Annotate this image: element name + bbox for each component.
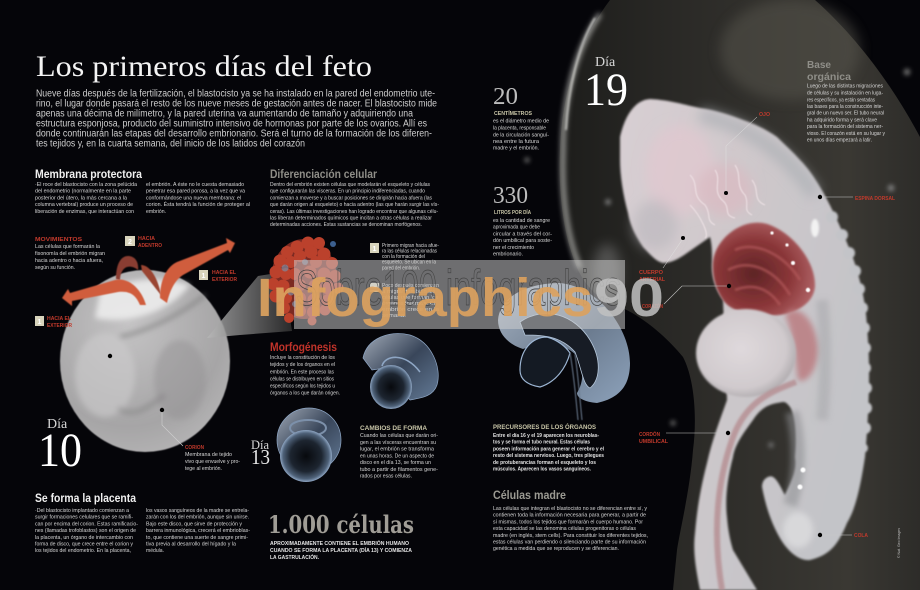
intro text: rino, el lugar donde pasará el resto de los nueve meses de gestación antes de nacer. El blastocisto mide [36,98,437,110]
step 1 text: con la formación del [382,254,425,260]
section: se forma la placenta: ·Del blastocisto implantado comienzan a [35,508,130,514]
label: hacia adentro [125,236,162,249]
section: base organica: orgánica [807,71,851,83]
section: diferenciacion celular: Dentro del embrión existen células que modelarán el esqueleto y células [270,182,430,188]
callout: cuerpo: ARTERIAL [639,277,666,283]
label: movimientos: hacia adentro o hacia afuera, [35,258,103,264]
diagram: day 10 blastocyst sphere [60,270,230,452]
stat: 330 litros: LITROS POR DÍA [494,208,531,216]
stat: 330 litros: 330 [493,183,528,209]
section: diferenciacion celular: determinadas acciones. Estas sustancias se denominan morfógenos. [270,222,422,228]
section: celulas madre: estas células van perdiendo o silenciando parte de su información [493,540,646,546]
stat: 20 centimetros: CENTÍMETROS [494,109,533,117]
section: se forma la placenta: los tejidos del endometrio. En la placenta, [35,548,131,554]
label: movimientos: fisonomía del embrión migran [35,251,105,257]
section: se forma la placenta: zarán con los del embrión, aunque sin unirse. [146,515,249,521]
label: corion: vivo que envuelve y pro- [185,459,240,465]
callout: cordon umbilical: UMBILICAL [639,439,669,445]
section: celulas madre: genética a medida que se reproducen y se diferencian. [493,546,619,552]
label: corion: tege al embrión. [185,466,222,472]
label: hacia el exterior (right): EXTERIOR [212,277,237,283]
section: diferenciacion celular: que darán origen al esqueleto) o hacia adentro (las que harán surgir las vís- [270,202,439,208]
stat: 20 centimetros: nea entre la futura [493,139,540,145]
step 1 text: pared del embrión. [382,265,420,271]
illustration: cell cluster [267,236,344,326]
section: base organica: res específicos, ya están sentadas [807,97,875,103]
marker dots [108,354,112,358]
label: hacia el exterior (left) [35,316,72,329]
section: membrana protectora: del endometrio (normalmente en la parte [35,189,131,195]
section: diferenciacion celular: comienzan a moverse y a buscar posiciones se dirigirán hacia afuera (las [270,195,432,201]
section: morfogenesis: embrión. En este proceso las [270,370,334,376]
label: hacia el exterior (right): HACIA EL [212,270,237,276]
section: se forma la placenta: forma de disco, que crece entre el corion y [35,542,133,548]
section: membrana protectora: columna vertebral) produce un proceso de [35,202,133,208]
section: base organica: para la formación del sistema ner- [807,124,883,130]
callout: cuerpo [639,236,685,283]
step 2 text: órganos internos. El [382,301,435,307]
watermark: 90 [594,268,664,328]
label: movimientos [35,237,105,271]
section: se forma la placenta: tiva previa al desarrollo del hígado y la [146,542,237,548]
section: celulas madre [493,490,648,552]
section: morfogenesis: órganos a los que darán origen. [270,390,340,396]
label: movimientos: MOVIMIENTOS [35,237,83,243]
photo: amniotic sac [524,0,920,590]
callout: corazon: CORAZÓN [642,302,663,310]
callout: cordon umbilical [639,430,730,445]
label: day 10: Día [47,417,68,432]
intro text: Nueve días después de la fertilización, el blastocisto ya se ha instalado en la pared del endometrio ute- [36,88,435,100]
section: se forma la placenta: Se forma la placenta [35,493,137,505]
section: precursores de los organos: músculos. Aparecen los vasos sanguíneos. [493,466,591,472]
section: precursores de los organos: Entre el día 16 y el 19 aparecen los neuroblas- [493,433,599,439]
section: celulas madre: madre (en inglés, stem cells). Para constituir los diferentes tejidos, [493,533,648,539]
section: cambios de forma: gen a las vísceras encuentran su [360,440,436,446]
label: hacia adentro: HACIA [138,236,155,242]
step 2 text: semana. [382,313,406,319]
section: diferenciacion celular: que configurarán las vísceras. En un principio indiferenciadas, cuando [270,189,425,195]
section: precursores de los organos [493,423,604,472]
callout: cuerpo: CUERPO [639,270,663,276]
stat: 330 litros [493,183,552,258]
callout: 1.000 celulas [268,510,414,561]
label: day 13: Día [251,438,270,452]
callout: cola: COLA [854,533,868,539]
section: membrana protectora: Membrana protectora [35,169,143,181]
section: diferenciacion celular: Diferenciación celular [270,169,377,181]
label: day 19: 19 [584,64,628,116]
yolk sac [696,309,796,397]
section: celulas madre: contienen toda la información necesaria para generar, a partir de [493,513,646,519]
section: base organica [807,59,885,143]
title: Los primeros días del feto [36,50,372,83]
intro text: tes tejidos y, en la cuarta semana, del inicio de los latidos del corazón [36,138,305,150]
watermark: Infographics [257,268,593,328]
section: se forma la placenta: nes (llamadas trofoblastos) son el origen de [35,528,136,534]
stat: 330 litros: aproximada que debe [493,225,540,231]
callout: espina dorsal: ESPINA DORSAL [855,196,896,202]
label: hacia adentro: ADENTRO [138,243,162,249]
step 2 text: células que forman los [382,295,438,301]
watermark: Sobre100 infographics [296,260,621,316]
step 2 text: embrión crece en la [382,307,440,313]
section: diferenciacion celular: las liberan determinados químicos que incitan a otras células a realizar [270,216,432,222]
section: se forma la placenta: los vasos sanguíneos de la madre se entrela- [146,508,249,514]
stat: 330 litros: embrionario. [493,252,523,258]
head shading [633,115,815,250]
label: day 13: 13 [251,445,270,469]
step 1 text: Primero migran hacia afue- [382,243,439,249]
stat: 20 centimetros: la placenta, responsable [493,125,546,131]
section: cambios de forma: tubo a partir de filamentos gene- [360,467,438,473]
section: cambios de forma: en unas horas. De un aspecto de [360,454,434,460]
section: membrana protectora: el embrión. A éste no le cuesta demasiado [146,182,244,188]
stat: 20 centimetros: madre y el embrión. [493,146,539,152]
section: cambios de forma [360,425,438,480]
photo credit: © Nat. Geo Images [896,528,901,558]
photo: day 19 embryo [620,99,872,590]
step 1 text [370,243,439,271]
umbilical cord stripe [717,382,796,590]
section: membrana protectora: conformándose una nueva membrana: el [146,195,241,201]
label: corion [185,445,240,472]
step 1 text: 1 [372,246,376,253]
label: day 10: 10 [38,424,82,477]
step 2 text [370,283,440,319]
callout: 1.000 celulas: 1.000 células [268,510,414,539]
section: morfogenesis: tejidos y de los órganos en el [270,362,335,368]
stat: 20 centimetros: es el diámetro medio de [493,119,549,125]
callout: cordon umbilical: CORDÓN [639,430,660,438]
section: precursores de los organos: PRECURSORES DE LOS ÓRGANOS [493,423,596,431]
stat: 330 litros: dón umbilical para soste- [493,238,552,244]
step 2 text: 2 [372,286,376,293]
section: base organica: en unos días empezará a latir. [807,137,872,143]
section: base organica: ha adquirido forma y será clave [807,117,877,123]
section: celulas madre: Células madre [493,490,566,502]
stat: 20 centimetros [493,84,549,152]
section: morfogenesis: Morfogénesis [270,342,337,354]
intro text: donde continuarán las etapas del desarrollo embrionario. Será el turno de la formación de los diferen- [36,128,432,140]
section: celulas madre: sí mismas, todos los tejidos que formarán el cuerpo humano. Por [493,519,643,525]
arrows: cell movements [62,238,235,306]
stat: 20 centimetros: de la circulación sanguí- [493,132,549,138]
callout: 1.000 celulas: CUANDO SE FORMA LA PLACENTA (DÍA 13) Y COMIENZA [270,546,412,554]
label: hacia el exterior (right): 1 [202,273,206,280]
illustration: morphogenesis embryo [363,334,438,409]
intro text [36,88,437,150]
section: cambios de forma: rados por esas células. [360,474,412,480]
stat: 20 centimetros: 20 [493,84,518,110]
section: se forma la placenta: barrera inmunológica, crecerá el embrioblas- [146,528,250,534]
section: membrana protectora: ·El roce del blastocisto con la zona pelúcida [35,182,138,188]
illustration: day 13 embryo [277,408,341,482]
section: diferenciacion celular [270,169,439,228]
label: movimientos: Las células que formarán la [35,244,101,250]
step 2 text: a migrar también las [382,289,436,295]
illustration: neural tube embryo [498,283,630,420]
section: membrana protectora [35,169,250,215]
callout: corazon [642,284,731,310]
intro text: estructura esponjosa, producto del suministro intensivo de hormonas por parte de los ovarios. Allí es [36,118,427,130]
callout: espina dorsal [818,195,896,202]
step 1 text: ra las células relacionadas [382,249,437,255]
step 1 text: esqueleto. Se ubican en la [382,260,437,266]
section: se forma la placenta [35,493,250,554]
section: cambios de forma: Cuando las células que darán ori- [360,433,438,439]
label: movimientos: según su función. [35,265,75,271]
label: corion: Membrana de tejido [185,452,232,458]
watermark [257,260,664,329]
section: se forma la placenta: Bajo este disco, que sirve de protección y [146,521,242,527]
callout: cola [818,533,868,539]
section: base organica: Luego de las distintas migraciones [807,84,883,90]
heart [713,223,818,381]
section: morfogenesis: Incluye la constitución de los [270,355,335,361]
stat: 330 litros: ner el crecimiento [493,245,534,251]
section: se forma la placenta: surgir formaciones celulares que se ramifi- [35,515,133,521]
callout: ojo [724,112,770,195]
section: morfogenesis [270,342,340,396]
section: precursores de los organos: de protuberancias forman el esqueleto y los [493,460,596,466]
section: membrana protectora: liberación de enzimas, que interactúan con [35,209,134,215]
section: morfogenesis: células se distribuyen en sitios [270,376,334,382]
section: base organica: vioso. El corazón está en su lugar y [807,131,885,137]
label: hacia adentro: 2 [128,239,132,246]
section: morfogenesis: específicos según los tejidos u [270,384,335,390]
section: base organica: gral de un nuevo ser. El tubo neural [807,111,884,117]
section: base organica: las bases para la construcción inte- [807,104,883,110]
section: membrana protectora: embrión. [146,209,166,215]
label: hacia el exterior (left): EXTERIOR [47,323,72,329]
step 2 text: Poco después comienzan [382,283,439,289]
stat: 330 litros: es la cantidad de sangre [493,218,550,224]
section: celulas madre: esta capacidad se las denomina células progenitoras o células [493,526,636,532]
stat: 330 litros: circular a través del cor- [493,232,552,238]
callout: 1.000 celulas: LA GASTRULACIÓN. [270,553,319,561]
lower body shading [783,219,825,548]
section: diferenciacion celular: ceras). Las últimas investigaciones han logrado encontrar que algunas célu- [270,209,438,215]
section: se forma la placenta: can por encima del corion. Estas ramificacio- [35,521,138,527]
section: base organica: de células y su instalación en luga- [807,91,883,97]
section: cambios de forma: lugar, el embrión se transforma [360,446,435,452]
section: base organica: Base [807,59,831,71]
section: membrana protectora: posterior del útero, la más cercana a la [35,195,128,201]
section: se forma la placenta: la placenta, un órgano de intercambio con [35,535,133,541]
section: se forma la placenta: médula. [146,548,164,554]
section: membrana protectora: corion. Ésta tendrá la función de proteger al [146,201,250,208]
label: hacia el exterior (left): 1 [38,319,42,326]
callout: 1.000 celulas: APROXIMADAMENTE CONTIENE EL EMBRIÓN HUMANO [270,539,410,547]
section: precursores de los organos: tos y se forma el tubo neural. Estas células [493,440,590,446]
section: cambios de forma: disco en el día 13, se forma un [360,460,431,466]
callout: ojo: OJO [759,112,770,118]
section: precursores de los organos: resto del sistema nervioso. Luego, tres pliegues [493,453,604,459]
label: hacia el exterior (right) [199,270,237,283]
label: day 19: Día [595,55,616,70]
label: corion: CORION [185,445,204,451]
section: cambios de forma: CAMBIOS DE FORMA [360,425,428,432]
intro text: apenas una décima de milímetro, y la pared uterina va aumentando de tamaño y adquiriendo una [36,108,413,120]
section: celulas madre: Las células que integran el blastocisto no se diferencian entre sí, y [493,506,647,512]
section: precursores de los organos: poseen información para generar el cerebro y el [493,446,604,452]
section: se forma la placenta: to, que contiene una suerte de sangre primi- [146,535,248,541]
section: membrana protectora: penetrar esa pared porosa, a la vez que va [146,189,246,195]
label: hacia el exterior (left): HACIA EL [47,316,72,322]
zoom beam [207,272,292,338]
